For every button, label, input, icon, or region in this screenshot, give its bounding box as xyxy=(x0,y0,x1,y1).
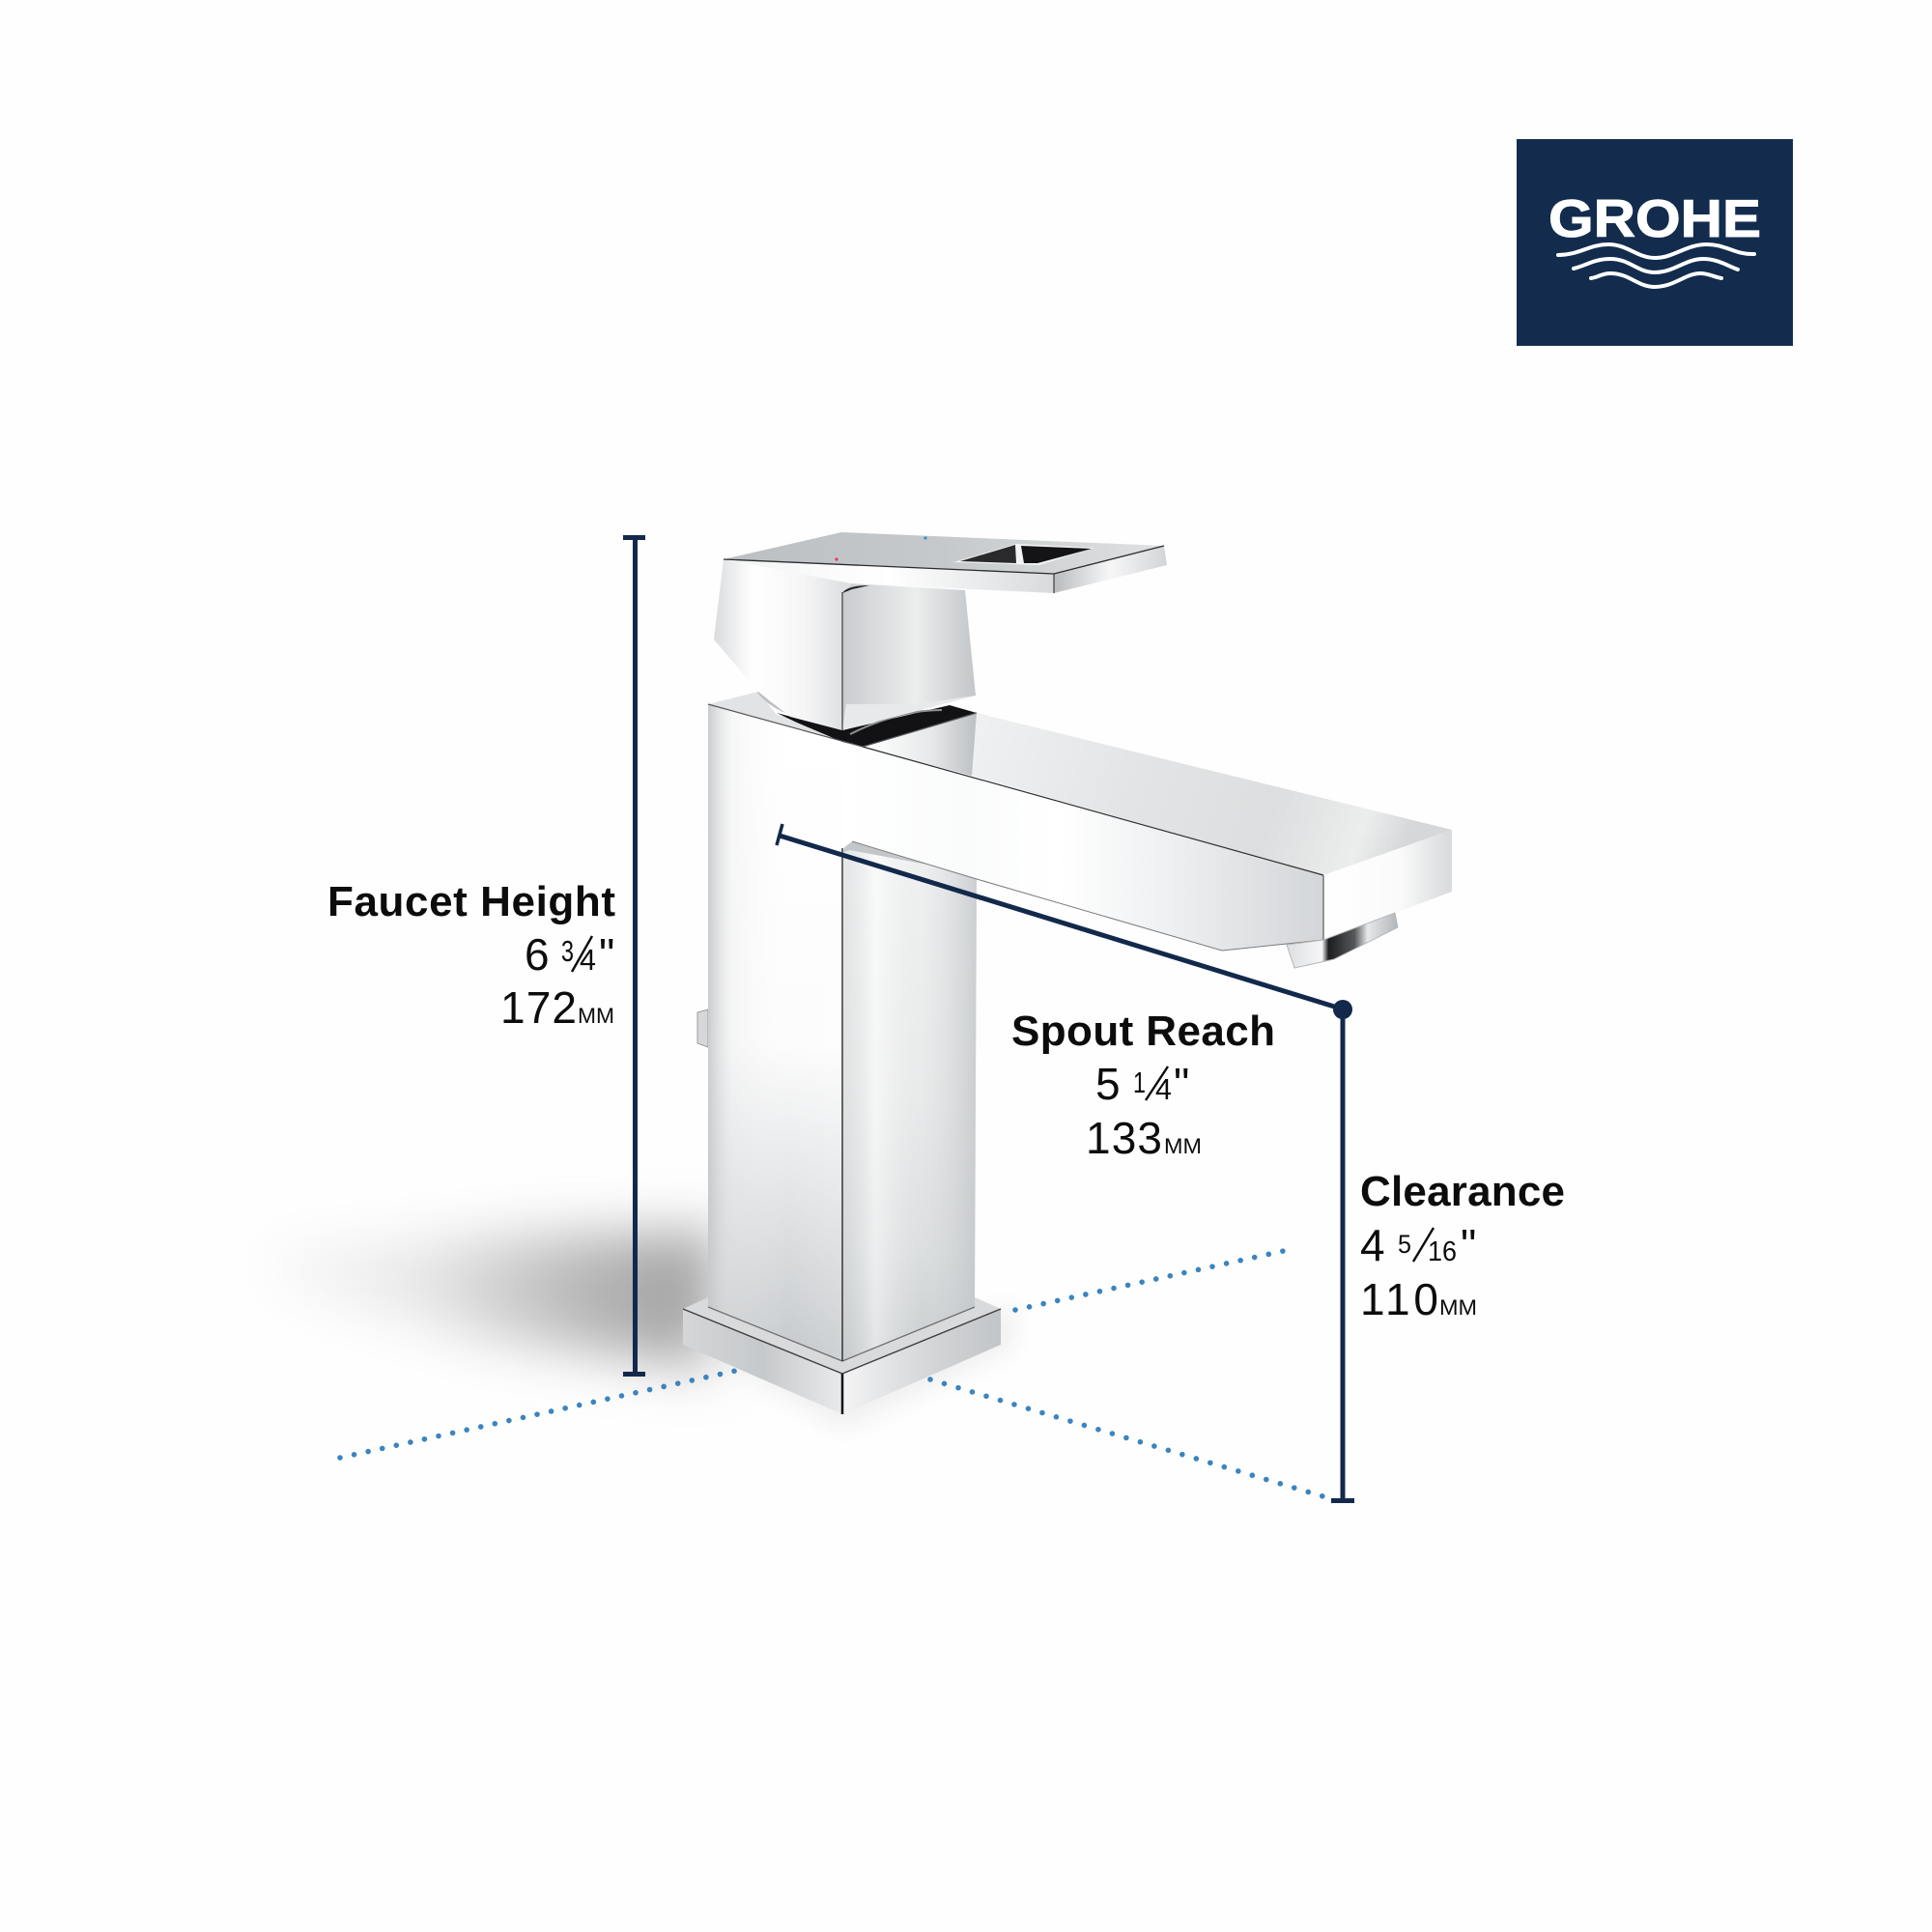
text: clearance: 5 xyxy=(1398,1230,1411,1259)
spout top face xyxy=(863,713,1452,875)
GROHE logo: GROHE xyxy=(1548,188,1761,248)
text: clearance: 4 xyxy=(1360,1220,1385,1270)
faucet illustration xyxy=(683,532,1452,1414)
spout front face xyxy=(842,741,1323,951)
text: clearance: " xyxy=(1461,1220,1476,1270)
GROHE logo xyxy=(1517,139,1793,346)
handle right face xyxy=(842,583,976,730)
text: clearance: MM xyxy=(1439,1295,1477,1320)
text: spout reach: " xyxy=(1174,1059,1189,1109)
text: spout reach: 5 xyxy=(1095,1059,1121,1109)
spout end face xyxy=(1323,830,1452,940)
text: faucet height: MM xyxy=(578,1004,614,1028)
handle lever plate xyxy=(724,532,1167,593)
text: spout reach: 1 xyxy=(1133,1065,1146,1099)
lever opening xyxy=(953,544,1094,565)
text: faucet height: 3 xyxy=(561,934,574,968)
hot and cold markers xyxy=(835,536,927,561)
faucet cast shadow xyxy=(256,1232,1014,1430)
text: spout reach: Spout Reach xyxy=(1011,1008,1275,1055)
drain lever xyxy=(697,1009,708,1047)
text: faucet height: 4 xyxy=(580,943,596,977)
text: spout reach: MM xyxy=(1164,1134,1202,1158)
text: clearance: 110 xyxy=(1360,1274,1438,1324)
dimension line: faucet height xyxy=(623,535,645,1377)
valve gap dark ring xyxy=(708,692,977,747)
text: faucet height xyxy=(327,878,615,1033)
faucet body right face xyxy=(708,841,977,1361)
dimension line: spout reach xyxy=(777,824,1344,1009)
handle left face xyxy=(714,559,852,730)
text: faucet height: 6 xyxy=(525,929,550,980)
text: clearance: Clearance xyxy=(1360,1168,1565,1215)
dimension line: clearance xyxy=(1331,1000,1354,1503)
text: spout reach xyxy=(1011,1008,1275,1163)
faucet base plate xyxy=(683,1297,1001,1414)
logo waves xyxy=(1558,244,1754,287)
text: spout reach: 133 xyxy=(1086,1113,1162,1163)
faucet body left face xyxy=(708,704,842,1361)
text: spout reach: 4 xyxy=(1155,1072,1172,1106)
text: clearance: 16 xyxy=(1428,1236,1457,1267)
aerator xyxy=(1287,913,1398,968)
text: clearance xyxy=(1360,1168,1565,1324)
text: faucet height: " xyxy=(599,929,614,980)
text: faucet height: Faucet Height xyxy=(327,878,615,925)
text: faucet height: 172 xyxy=(500,982,577,1033)
dotted floor guide lines xyxy=(340,1251,1323,1496)
